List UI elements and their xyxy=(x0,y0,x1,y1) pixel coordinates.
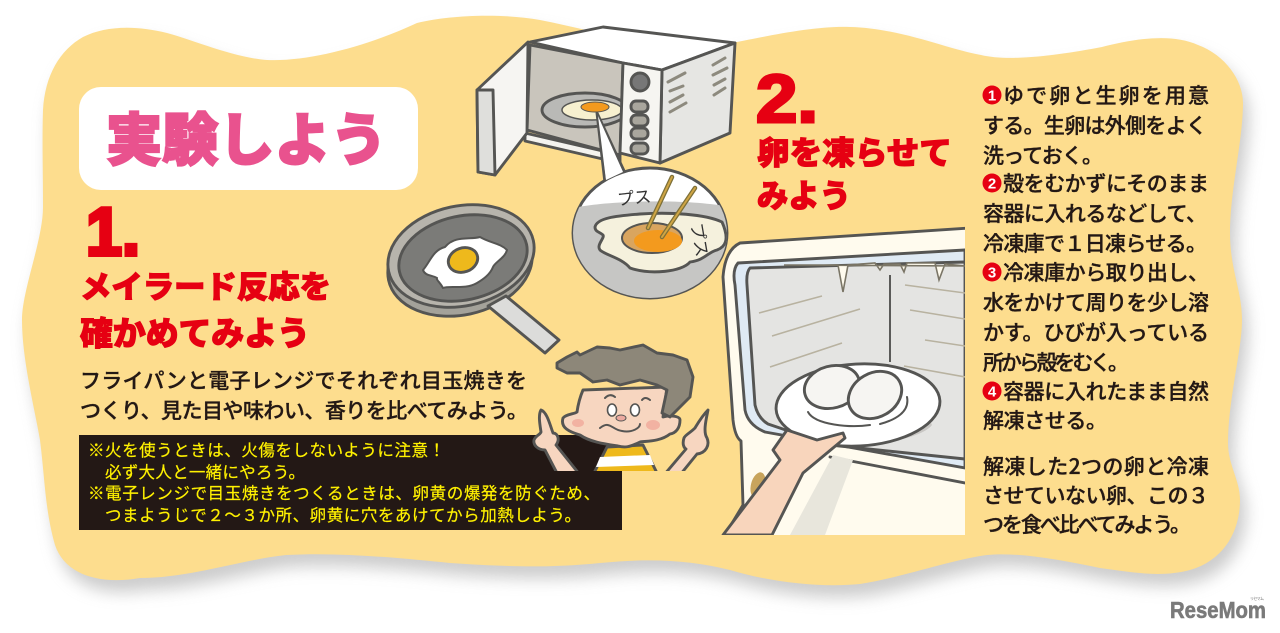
illustration: frying pan xyxy=(378,192,559,353)
section 1 description: つくり、見た目や味わい、香りを比べてみよう。 xyxy=(80,395,528,425)
closing text: させていない卵、この３ xyxy=(983,480,1209,510)
shirt xyxy=(593,445,658,475)
step 3 marker: 3 xyxy=(988,264,996,282)
logo: ReseMom xyxy=(1170,597,1266,623)
steps text: 解凍させる。 xyxy=(983,405,1107,435)
sound label left: プス xyxy=(616,182,652,211)
steps text: 容器に入れたまま自然 xyxy=(1003,376,1209,406)
step 2 marker: 2 xyxy=(988,176,996,192)
caution box: つまようじで２〜３か所、卵黄に穴をあけてから加熱しよう。 xyxy=(105,502,581,526)
caution box: ※火を使うときは、火傷をしないように注意！ xyxy=(88,437,445,461)
steps text: かす。ひびが入っている xyxy=(983,317,1209,347)
step 4 marker: 4 xyxy=(988,384,997,400)
logo: リセマム xyxy=(1250,596,1264,602)
section 2 title line 2: みよう xyxy=(757,171,851,217)
caution box xyxy=(79,435,622,530)
steps text xyxy=(982,80,1209,435)
step 2 marker xyxy=(982,174,1002,192)
step 4 marker xyxy=(982,382,1002,400)
steps text: ゆで卵と生卵を用意 xyxy=(1003,80,1209,110)
step 3 marker xyxy=(982,262,1002,282)
steps text: する。生卵は外側をよく xyxy=(983,110,1207,140)
closing text: つを食べ比べてみよう。 xyxy=(983,509,1191,539)
closing text xyxy=(983,451,1209,539)
section 2 title line 1: 卵を凍らせて xyxy=(757,128,952,174)
section 1 description: フライパンと電子レンジでそれぞれ目玉焼きを xyxy=(80,365,527,395)
title: 実験しよう xyxy=(106,95,387,177)
illustration: microwave xyxy=(477,27,735,175)
eyes and nose xyxy=(608,404,616,416)
section 1 title line 2: 確かめてみよう xyxy=(80,307,310,355)
illustration: freezer with eggs on a plate xyxy=(722,228,970,540)
title badge xyxy=(79,87,418,190)
steps text: 冷凍庫で１日凍らせる。 xyxy=(983,228,1207,258)
section 1 title line 1: メイラード反応を xyxy=(80,262,331,307)
illustration: boy pointing up xyxy=(534,345,708,475)
right arm xyxy=(664,410,708,475)
closing text: 解凍した2つの卵と冷凍 xyxy=(983,451,1209,481)
number 1: 1. xyxy=(86,194,140,270)
illustration: magnified egg callout xyxy=(565,113,735,300)
face xyxy=(562,387,680,447)
steps text: 容器に入れるなどして、 xyxy=(983,198,1207,228)
section 2 heading xyxy=(756,61,952,217)
steps text: 水をかけて周りを少し溶 xyxy=(983,287,1209,317)
step 1 marker xyxy=(982,86,1002,104)
hair xyxy=(557,345,693,417)
step 1 marker: 1 xyxy=(988,88,996,104)
section 1 description xyxy=(80,365,528,425)
left arm xyxy=(534,410,580,475)
number 2: 2. xyxy=(756,61,818,137)
steps text: 洗っておく。 xyxy=(983,140,1103,170)
steps text: 冷凍庫から取り出し、 xyxy=(1003,257,1209,287)
sound label right: プス xyxy=(686,221,716,258)
caution box: 必ず大人と一緒にやろう。 xyxy=(105,459,305,483)
steps text: 殻をむかずにそのまま xyxy=(1003,168,1209,198)
steps text: 所から殻をむく。 xyxy=(983,347,1129,377)
section 1 heading xyxy=(80,194,331,355)
caution box: ※電子レンジで目玉焼きをつくるときは、卵黄の爆発を防ぐため、 xyxy=(88,480,600,504)
